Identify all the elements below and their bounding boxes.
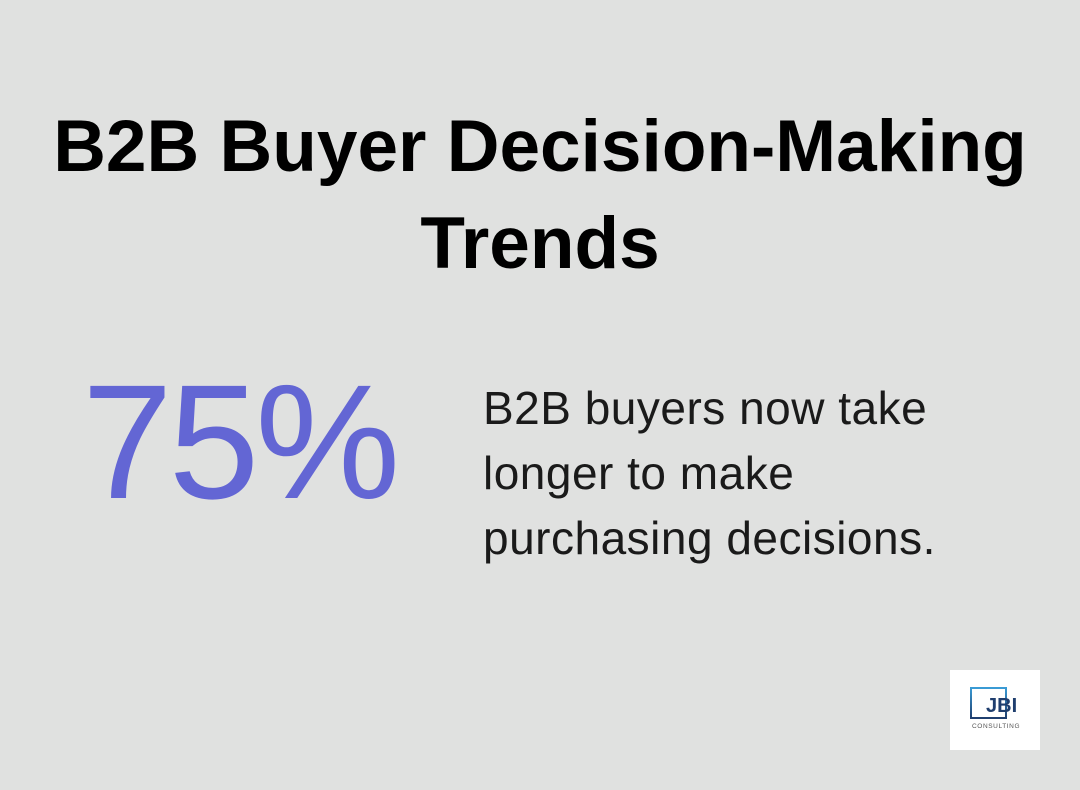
title: B2B Buyer Decision-Making: [53, 106, 1027, 187]
big stat: 75%: [82, 350, 396, 533]
description text: longer to make: [483, 447, 794, 499]
logo: CONSULTING: [972, 723, 1020, 730]
logo: JBI: [986, 695, 1017, 717]
description text: B2B buyers now take: [483, 382, 927, 434]
description text: [483, 382, 936, 564]
title: [53, 106, 1027, 284]
logo: [950, 670, 1040, 750]
title: Trends: [420, 203, 660, 284]
description text: purchasing decisions.: [483, 512, 936, 564]
